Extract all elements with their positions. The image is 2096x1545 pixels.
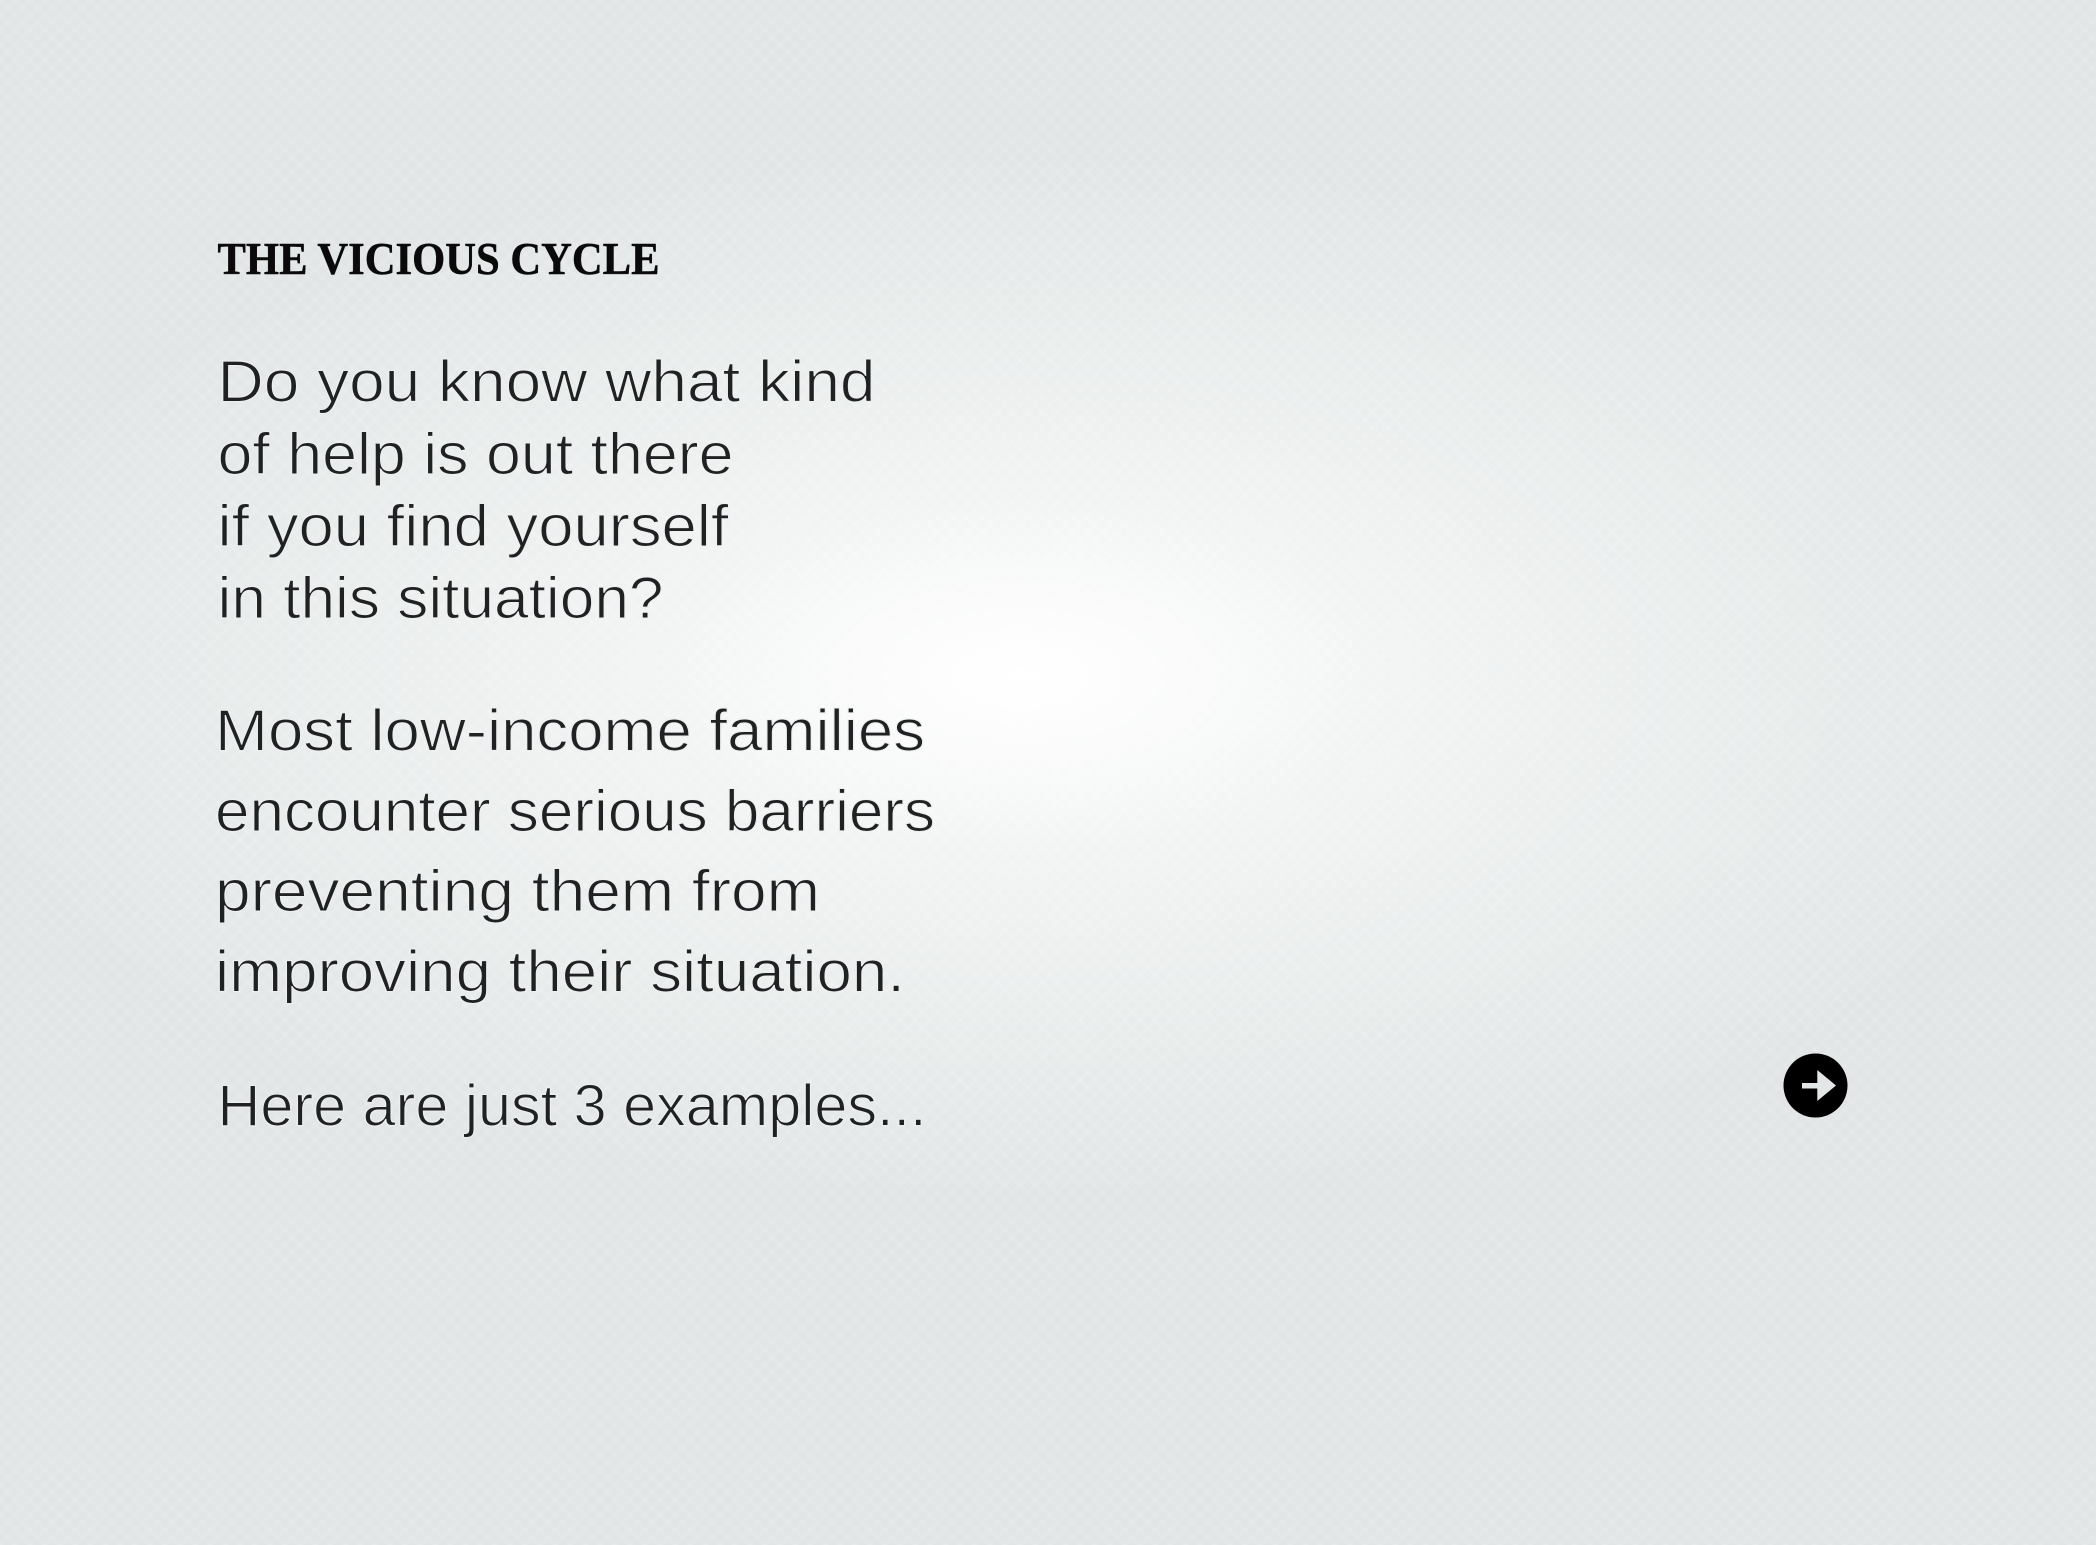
question paragraph: if you find yourself bbox=[218, 494, 729, 559]
barriers paragraph: improving their situation. bbox=[215, 940, 905, 1005]
barriers paragraph: preventing them from bbox=[215, 859, 820, 924]
question paragraph: of help is out there bbox=[218, 422, 734, 487]
question paragraph: in this situation? bbox=[218, 566, 664, 631]
barriers paragraph: Most low-income families bbox=[215, 699, 925, 764]
question paragraph: Do you know what kind bbox=[218, 350, 876, 415]
barriers paragraph bbox=[215, 699, 935, 1005]
barriers paragraph: encounter serious barriers bbox=[215, 779, 935, 844]
examples line: Here are just 3 examples... bbox=[218, 1074, 926, 1139]
heading: THE VICIOUS CYCLE bbox=[218, 233, 660, 284]
icon: next arrow button bbox=[1784, 1054, 1848, 1118]
question paragraph bbox=[218, 350, 876, 631]
